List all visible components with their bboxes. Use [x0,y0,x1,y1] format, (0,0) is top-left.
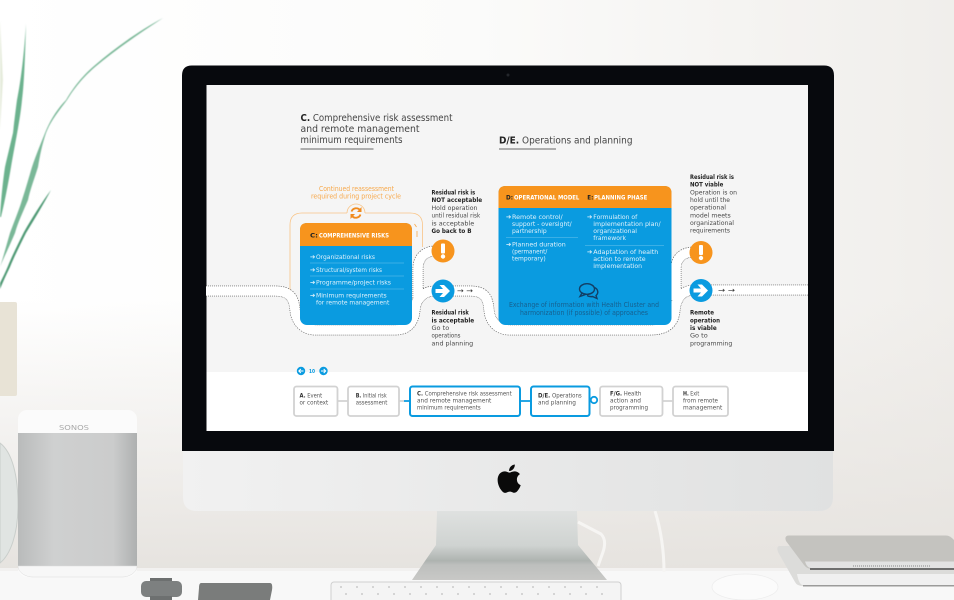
risk list: for remote management [316,298,390,306]
operational model list: ➔ [506,213,512,221]
text: residual risk acceptable: operations [432,333,460,340]
cable behind stand [578,511,664,572]
laptop [777,546,954,586]
nav box A: A. Event [300,394,323,400]
nav box C [410,386,520,416]
text: residual risk not acceptable: Hold operation [432,205,478,212]
plant leaves [0,18,163,289]
nav box B [348,386,399,416]
heading C [300,113,453,150]
risk list: ➔ [310,266,316,274]
planning phase list: implementation plan/ [593,220,661,228]
flow track: left to card C and on to decision circles [206,251,435,330]
operational model list: temporary) [512,254,546,262]
icon: warning circle C [432,240,454,262]
nav box C: and remote management [417,398,492,404]
icon: speech bubbles [580,284,598,298]
text: residual risk not viable: Residual risk is [690,174,734,181]
icon: arrow circle C [432,280,454,302]
screen [206,85,808,431]
monitor bezel [182,66,834,451]
flow track: from arrow to card D/E and on to exit [443,252,808,330]
text: remote operation viable: Remote [690,310,714,317]
text: residual risk not acceptable: Residual risk is [432,190,475,196]
exchange of information text: Exchange of information with Health Cluster and [509,301,659,309]
nav box D/E: and planning [538,401,576,407]
text: residual risk not acceptable: NOT acceptable [432,197,482,204]
reassessment note: Continued reassessment [319,185,394,193]
phone [198,583,272,600]
text: remote operation viable: is viable [690,325,717,332]
text: remote operation viable: operation [690,317,720,324]
panel: operational model and planning phase [498,186,672,325]
text: residual risk not acceptable: is acceptable [432,220,474,228]
nav box C: C. Comprehensive risk assessment [417,391,512,397]
card headers: D: [506,194,513,202]
navigation connectors [337,400,673,402]
nav box C: minimum requirements [417,405,481,411]
planning phase list: ➔ [587,213,593,221]
camera [506,74,510,76]
pager: 10 [309,369,315,375]
nav box F/G: action and [610,398,641,404]
heading C: C. Comprehensive risk assessment [300,113,453,124]
operational model list: support - oversight/ [512,220,572,228]
panel: operational model and planning phase: OPERATIONAL MODEL [514,194,579,202]
panel: operational model and planning phase: E: [587,194,593,202]
monitor stand [412,511,607,580]
text: residual risk not viable: organizational [690,220,734,227]
planning phase list: framework [593,234,626,242]
text: residual risk not acceptable: Go back to B [432,228,472,235]
planning phase list: Adaptation of health [593,248,658,256]
risk list: ➔ [310,291,316,299]
text: residual risk not acceptable [432,190,482,235]
background: desk [0,568,954,600]
tablet [785,536,954,570]
card header: C: [310,233,318,240]
nav box F/G [600,386,662,416]
arrows on exit track: → → [718,286,735,294]
panel: comprehensive risks: COMPREHENSIVE RISKS [319,233,389,240]
nav box A [294,386,338,416]
risk list: ➔ [310,279,316,287]
text: residual risk not viable: requirements [690,228,730,235]
heading D/E: D/E. Operations and planning [499,136,632,146]
operational model list: Remote control/ [512,213,564,221]
mouse [712,574,778,600]
nav box B: assessment [356,401,388,407]
text: residual risk not viable: NOT viable [690,182,723,189]
nav box H: management [683,405,723,411]
text: residual risk acceptable [432,310,474,348]
text: residual risk not viable: Operation is on [690,189,737,196]
planning phase list: implementation [593,262,642,270]
nav box F/G: F/G. Health [610,391,642,397]
nav box H: H. Exit [683,391,700,397]
exchange of information text: harmonization (if possible) of approaches [520,309,648,317]
nav box H [673,386,728,416]
nav box B: B. Initial risk [356,394,387,400]
glass vase [0,443,18,563]
text: residual risk acceptable: is acceptable [432,317,474,324]
risk list: ➔ [310,253,316,261]
operational model list [506,213,578,262]
keyboard [331,582,621,600]
risk list: Minimum requirements [316,291,387,299]
panel: comprehensive risks [300,223,412,325]
nav box H: from remote [683,398,718,404]
text: residual risk acceptable: Go to [432,325,449,332]
text: residual risk not viable: hold until the [690,197,730,204]
apple logo [498,464,521,493]
monitor chin [183,440,833,511]
text: residual risk not viable: model meets [690,212,731,219]
panel: operational model and planning phase: PLANNING PHASE [594,194,647,202]
text: residual risk not viable [690,174,737,235]
operational model list: Planned duration [512,240,566,248]
planning phase list: ➔ [587,248,593,256]
text: residual risk not acceptable: until residual risk [432,212,481,220]
planning phase list: Formulation of [593,213,638,221]
operational model list: ➔ [506,240,512,248]
planning phase list [585,213,664,270]
text: remote operation viable: programming [690,340,732,347]
arrows on track C: → → [457,287,473,295]
beige object on wall [0,302,17,396]
text: residual risk not viable: operational [690,205,726,212]
operational model list: (permanent/ [512,247,548,255]
text: residual risk acceptable: Residual risk [432,310,470,317]
text: residual risk acceptable: and planning [432,341,473,348]
text: remote operation viable: Go to [690,333,708,340]
speaker brand: SONOS [59,424,90,432]
icon: warning circle D/E [690,241,712,264]
risk list: Structural/system risks [316,266,383,274]
icon: arrow circle D/E [690,279,712,302]
speaker [18,410,137,577]
nav box F/G: programming [610,405,648,411]
risk list: Programme/project risks [316,279,392,287]
risk list: Organizational risks [316,253,376,261]
planning phase list: organizational [593,227,637,235]
nav box A: or context [300,401,329,407]
nav box D/E [531,386,590,416]
background: lower wall shade [0,300,954,570]
reassessment note: required during project cycle [311,192,401,200]
exchange of information text [509,301,659,317]
heading C: and remote management [300,124,420,135]
reassessment loop with cycle icon [290,204,422,297]
reassessment note [311,185,401,200]
watch [141,578,182,600]
risk list [310,253,404,306]
nav plus connector [591,397,597,403]
operational model list: partnership [512,227,547,235]
pager [297,367,328,375]
text: remote operation viable [690,310,732,347]
nav box D/E: D/E. Operations [538,394,582,400]
planning phase list: action to remote [593,255,646,263]
heading C: minimum requirements [300,135,403,146]
